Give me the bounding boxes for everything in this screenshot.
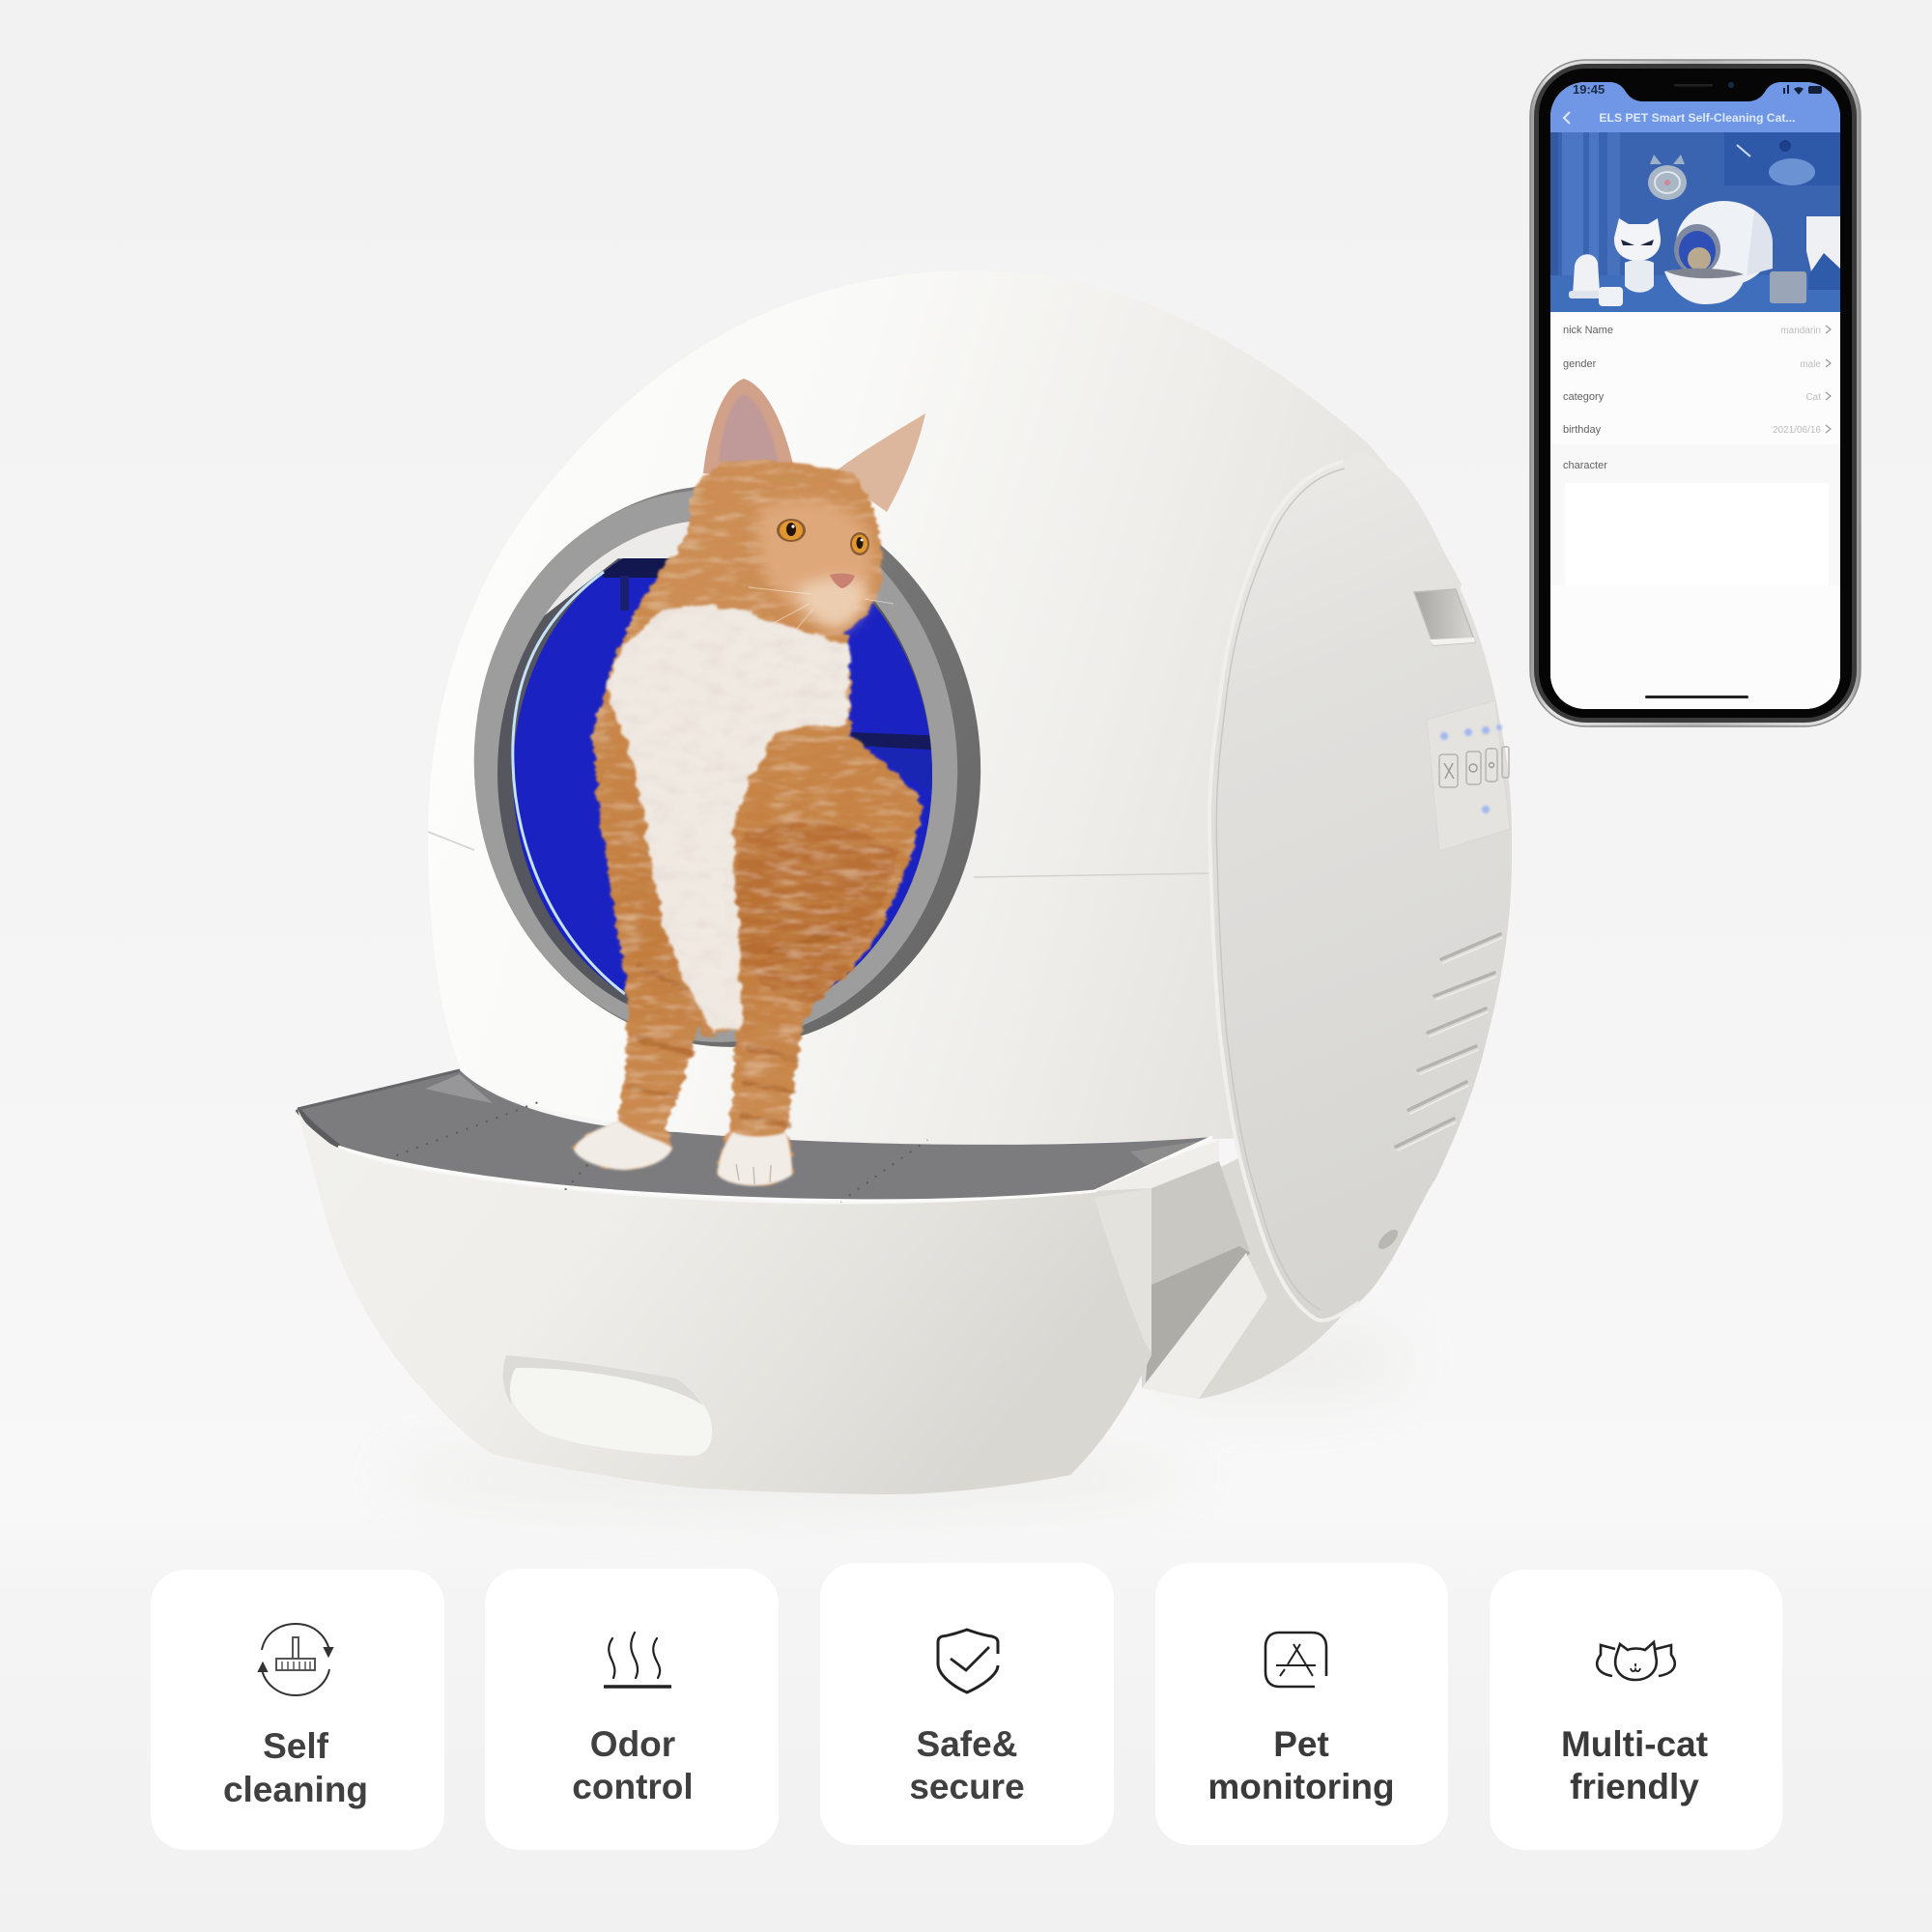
light strip arc [513, 572, 625, 994]
tray rim highlight [338, 1137, 1212, 1201]
card: multi-cat friendly [1490, 1570, 1782, 1850]
profile rows: character [1563, 460, 1607, 471]
panel rim [1209, 462, 1359, 1321]
card: odor control [485, 1569, 779, 1850]
mini robot [1614, 218, 1661, 261]
profile rows: nick Name [1563, 325, 1613, 336]
white chest [607, 606, 849, 1032]
tray handle [503, 1355, 712, 1456]
mini box [1770, 271, 1806, 303]
dome shell [428, 270, 1462, 1145]
icon: app store tile [1265, 1633, 1326, 1687]
icon: odor waves [604, 1633, 671, 1687]
profile rows [1563, 325, 1613, 471]
door top inner wall [545, 522, 692, 616]
phone screen [1550, 77, 1840, 709]
app title: ELS PET Smart Self-Cleaning Cat... [1599, 111, 1796, 125]
row chevrons [1826, 326, 1831, 433]
icon: broom with cycle arrows [259, 1624, 332, 1695]
door opening ring [473, 487, 981, 1047]
back chevron [1564, 112, 1570, 124]
card: odor control: control [572, 1767, 694, 1806]
vents [1396, 934, 1502, 1151]
eyes [777, 519, 869, 555]
mini litter box [1676, 201, 1773, 286]
phone [1530, 60, 1861, 726]
base right flap [1094, 1188, 1151, 1352]
profile values: male [1800, 359, 1821, 370]
control panel [1427, 700, 1510, 851]
base tray [298, 1109, 1151, 1494]
text box [1565, 483, 1829, 585]
white paws [574, 1121, 792, 1185]
profile rows: gender [1563, 358, 1597, 370]
profile values: mandarin [1780, 326, 1821, 336]
home indicator [1645, 696, 1748, 698]
face mask [759, 500, 872, 630]
whiskers [749, 587, 894, 652]
profile rows: birthday [1563, 424, 1602, 436]
toes [736, 1164, 771, 1184]
card: safe and secure [820, 1563, 1114, 1845]
mini cylinder [1573, 254, 1600, 295]
text: Odor [590, 1724, 675, 1764]
back panel [1209, 454, 1512, 1321]
side cavity with waste drawer [1142, 1161, 1267, 1399]
round port [1376, 1227, 1401, 1252]
tray mat [298, 1070, 1212, 1202]
app banner [1550, 132, 1840, 312]
text: Safe& [917, 1724, 1017, 1764]
rear body under the panel [1140, 1140, 1348, 1399]
notch [1611, 82, 1779, 101]
status icons [1783, 85, 1822, 95]
blue interior [513, 558, 932, 997]
card: multi-cat friendly: friendly [1570, 1767, 1699, 1806]
card: self cleaning: cleaning [223, 1770, 368, 1809]
gray band [1550, 444, 1840, 585]
drawer side strip [1094, 1140, 1219, 1191]
profile rows: category [1563, 391, 1605, 403]
dome seam lines [428, 832, 1212, 877]
profile values [1773, 326, 1821, 436]
text: Multi-cat [1561, 1724, 1708, 1764]
icon: shield check [938, 1630, 998, 1692]
text: Pet [1273, 1724, 1329, 1764]
orange fur body [574, 461, 923, 1184]
text: Self [263, 1726, 329, 1766]
profile values: 2021/06/16 [1773, 425, 1821, 436]
app header [1550, 82, 1840, 133]
floor shadow [386, 1323, 1410, 1507]
carry handle [1414, 589, 1475, 645]
right ear [833, 413, 925, 512]
product: litter box [298, 270, 1512, 1494]
left ear [703, 379, 797, 483]
icon: three cats [1597, 1642, 1675, 1680]
card: pet monitoring: monitoring [1208, 1767, 1395, 1806]
cat [574, 379, 925, 1185]
phone frame [1530, 60, 1861, 726]
profile values: Cat [1805, 392, 1821, 403]
card: self cleaning [151, 1570, 444, 1850]
card: safe and secure: secure [909, 1767, 1025, 1806]
mini fountain [1599, 287, 1623, 306]
nose [830, 574, 855, 588]
status bar time: 19:45 [1573, 82, 1605, 97]
card: pet monitoring [1155, 1563, 1448, 1845]
